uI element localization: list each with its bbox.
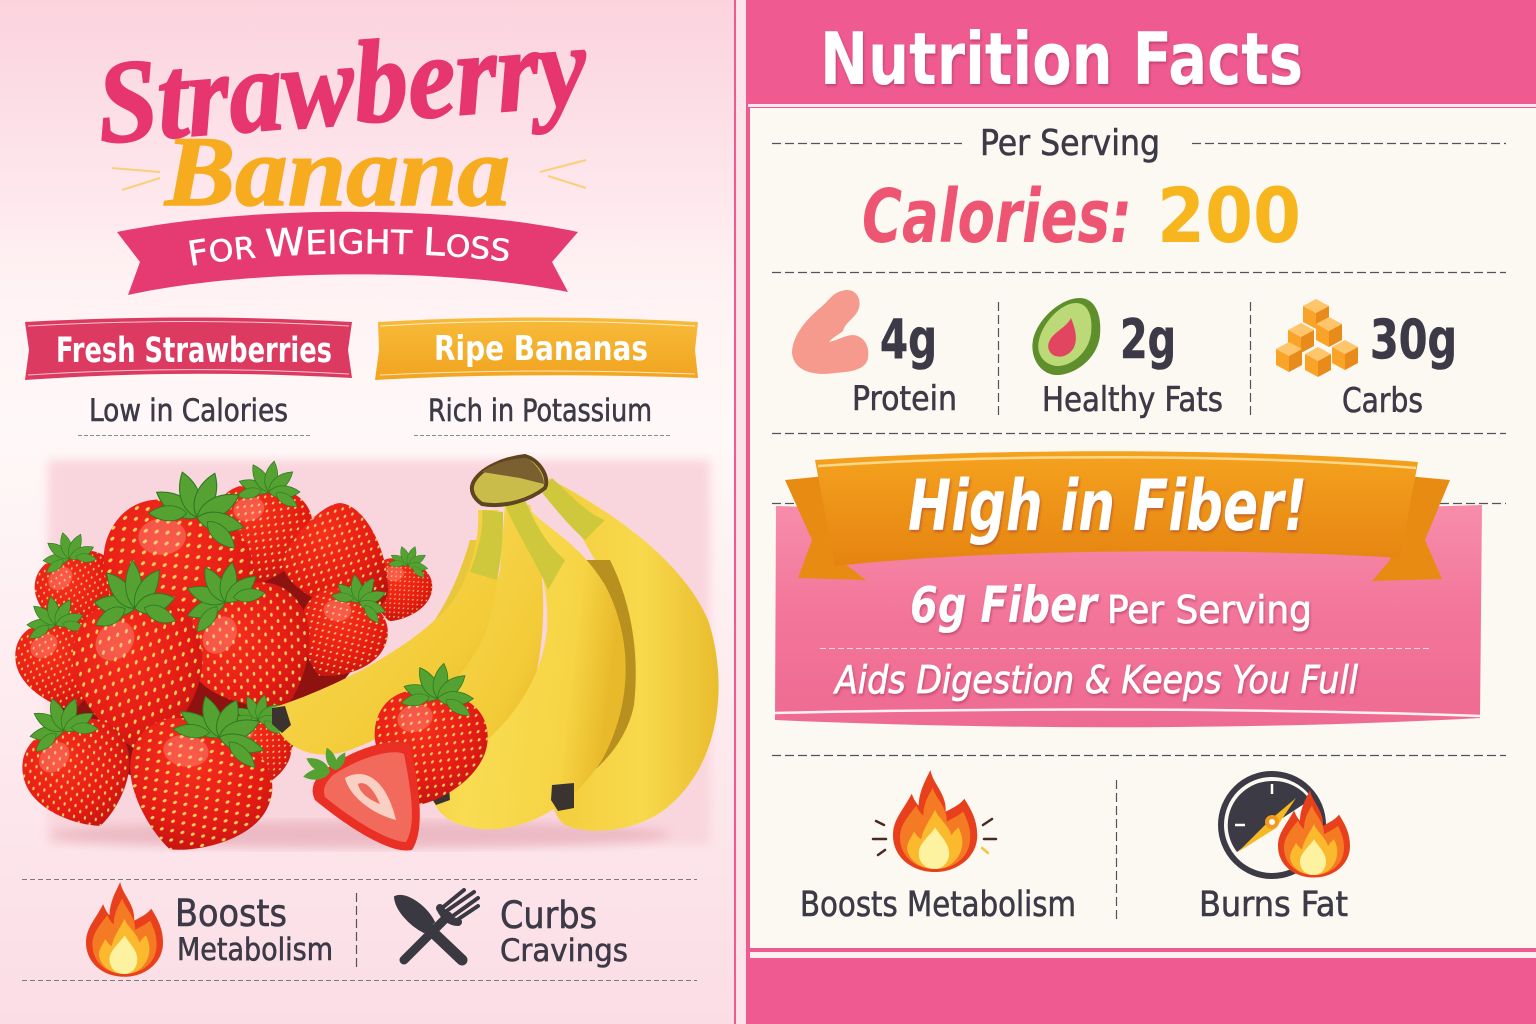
text: boosts metabolism left: Boosts	[175, 892, 287, 935]
text: per serving: Per Serving	[980, 123, 1160, 164]
macro: protein: Protein	[852, 379, 957, 419]
label: fresh strawberries	[25, 318, 352, 380]
calories: 200	[1157, 171, 1301, 260]
panel: right page background	[734, 0, 1536, 1024]
pile shadow	[50, 540, 375, 775]
benefit: burns fat	[1199, 774, 1350, 925]
macro: protein: 4g	[880, 308, 937, 371]
benefit: boosts metabolism	[800, 770, 1076, 925]
strawberry in front of bananas	[363, 654, 500, 814]
macro: healthy fats: 2g	[1120, 308, 1176, 371]
macro: carbs: 30g	[1370, 308, 1457, 371]
label: ripe bananas: Ripe Bananas	[434, 329, 648, 369]
cut strawberry	[302, 742, 420, 851]
panel: high in fiber	[772, 451, 1506, 727]
icon: flame with sparks	[873, 770, 996, 872]
strawberry pile back	[1, 445, 445, 879]
label: fresh strawberries: Fresh Strawberries	[56, 331, 332, 371]
icon: flame left	[86, 882, 163, 977]
text: aids digestion: Aids Digestion & Keeps You Full	[833, 658, 1358, 702]
macro: carbs	[1276, 299, 1457, 421]
text: curbs cravings: Curbs	[500, 894, 597, 937]
text: curbs cravings	[500, 894, 628, 969]
dashed rule	[22, 880, 697, 980]
ribbon: for weight loss	[117, 212, 578, 295]
icon: gauge with flame	[1221, 774, 1350, 878]
photo backdrop	[48, 460, 710, 845]
banana crown	[472, 456, 546, 505]
banana bunch	[272, 456, 719, 831]
text: fiber amount: 6g Fiber	[910, 576, 1099, 634]
illustration: strawberries and bananas	[1, 445, 719, 879]
sparkle strokes	[112, 160, 586, 190]
text: boosts metabolism left: Metabolism	[177, 932, 333, 968]
icon: avocado	[1032, 298, 1100, 375]
heading: nutrition facts: Nutrition Facts	[820, 17, 1303, 101]
macro: healthy fats	[1032, 298, 1223, 420]
panel: left background	[0, 0, 734, 1024]
title word: Banana: Banana	[164, 116, 510, 227]
panel: high in fiber: High in Fiber!	[908, 465, 1307, 547]
text: fiber amount	[910, 576, 1312, 634]
benefit: boosts metabolism: Boosts Metabolism	[800, 885, 1076, 925]
text: curbs cravings: Cravings	[500, 933, 628, 969]
macro: protein	[792, 290, 957, 419]
text: rich in potassium: Rich in Potassium	[428, 393, 652, 429]
label: ripe bananas	[375, 318, 698, 380]
macro: carbs: Carbs	[1342, 381, 1423, 421]
ribbon: for weight loss: FOR WEIGHT LOSS	[189, 226, 509, 266]
icon: muscle arm	[792, 290, 868, 374]
ground shadow	[50, 821, 670, 849]
title: Strawberry Banana	[92, 0, 592, 227]
icon: sugar cubes	[1276, 299, 1358, 377]
benefit: burns fat: Burns Fat	[1199, 885, 1348, 925]
banana tips	[272, 706, 574, 811]
calories: Calories:	[862, 174, 1132, 260]
text: boosts metabolism left	[175, 892, 333, 968]
macro: healthy fats: Healthy Fats	[1042, 380, 1223, 420]
text: fiber amount: Per Serving	[1107, 588, 1312, 632]
ribbon: high in fiber	[815, 451, 1418, 566]
text: low in calories: Low in Calories	[89, 393, 288, 429]
icon: fork and knife	[395, 890, 478, 960]
title word: Strawberry: Strawberry	[92, 0, 592, 169]
